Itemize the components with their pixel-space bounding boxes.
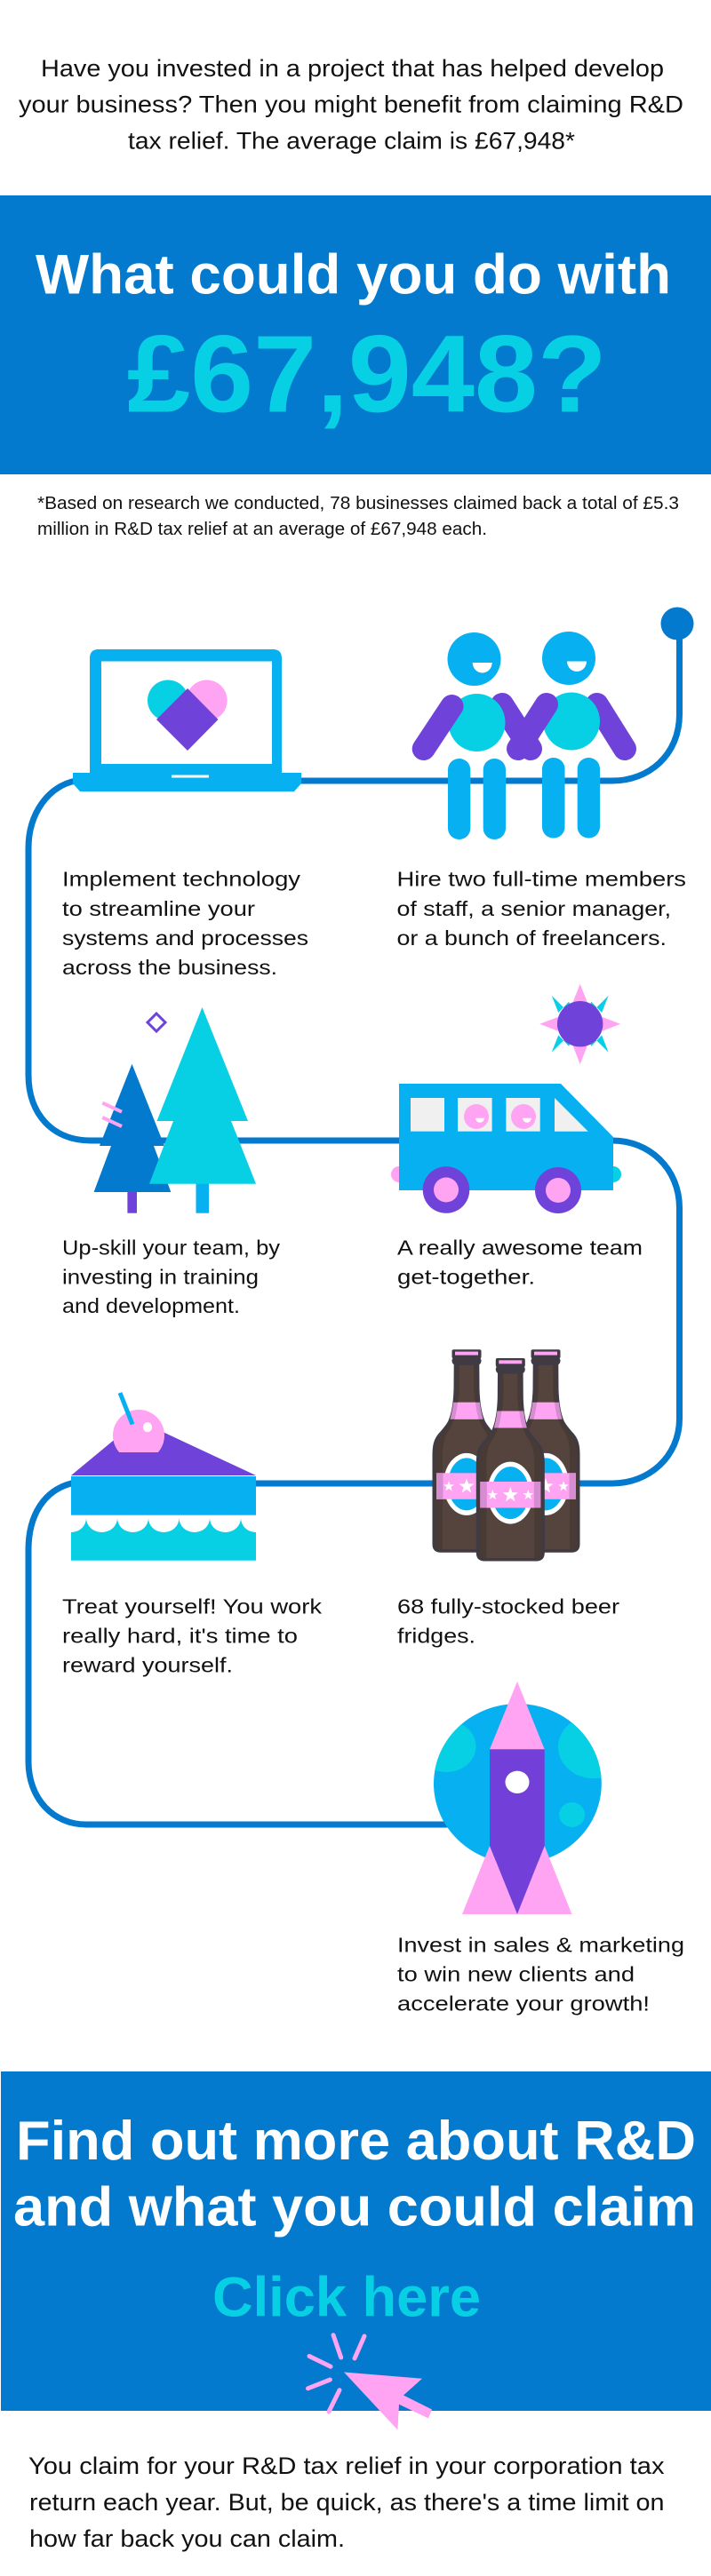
icon: trees [94, 1007, 256, 1213]
person two [518, 632, 625, 839]
closing text: return each year. But, be quick, as there's a time limit on [29, 2489, 664, 2516]
text: team get-together: A really awesome team [397, 1236, 643, 1260]
footnote [37, 494, 679, 539]
headline figure: £67,948? [127, 314, 607, 435]
text: implement technology: across the business. [62, 956, 277, 979]
text: up-skill: Up-skill your team, by [62, 1236, 281, 1260]
text: team get-together: get-together. [397, 1266, 535, 1289]
intro text: your business? Then you might benefit from claiming R&D [19, 91, 683, 117]
text: sales and marketing: to win new clients and [397, 1963, 635, 1986]
text: beer fridges: fridges. [397, 1624, 475, 1647]
call to action heading: Find out more about R&D [16, 2111, 696, 2172]
icon: two team members [424, 632, 625, 839]
call to action heading: and what you could claim [13, 2176, 696, 2238]
text: up-skill [62, 1236, 281, 1317]
text: sales and marketing: Invest in sales & marketing [397, 1933, 684, 1956]
text: implement technology [62, 867, 308, 979]
text: sales and marketing [397, 1933, 684, 2015]
icon: cake slice [71, 1393, 256, 1561]
click here link: Click here [212, 2266, 481, 2328]
footnote: million in R&D tax relief at an average of £67,948 each. [37, 520, 487, 539]
icon: sun [539, 984, 620, 1064]
text: team get-together [397, 1236, 643, 1289]
icon: cursor [308, 2335, 432, 2430]
text: implement technology: to streamline your [62, 897, 255, 920]
icon: van [391, 1084, 621, 1213]
text: sales and marketing: accelerate your growth! [397, 1992, 650, 2015]
text: hire staff [396, 867, 686, 950]
text: implement technology: systems and processes [62, 926, 308, 950]
heading: What could you do with [36, 243, 671, 306]
text: treat yourself: Treat yourself! You work [62, 1595, 323, 1618]
text: beer fridges: 68 fully-stocked beer [397, 1595, 619, 1618]
closing text: how far back you can claim. [29, 2525, 345, 2552]
text: hire staff: Hire two full-time members [396, 867, 686, 890]
panel: headline banner [0, 195, 711, 474]
closing text: You claim for your R&D tax relief in your corporation tax [28, 2453, 665, 2479]
intro text [19, 55, 683, 155]
icon: rocket and globe [434, 1682, 602, 1914]
text: up-skill: and development. [62, 1294, 240, 1317]
text: treat yourself [62, 1595, 323, 1676]
panel: call to action banner [1, 2071, 711, 2411]
text: hire staff: or a bunch of freelancers. [396, 926, 667, 950]
text: treat yourself: reward yourself. [62, 1653, 233, 1676]
icon: beer bottles [434, 1349, 579, 1560]
text: treat yourself: really hard, it's time to [62, 1624, 298, 1647]
connector path [28, 608, 693, 1825]
footnote: *Based on research we conducted, 78 businesses claimed back a total of £5.3 [37, 494, 679, 513]
text: beer fridges [397, 1595, 619, 1647]
intro text: tax relief. The average claim is £67,948* [128, 128, 576, 155]
person one [424, 632, 531, 839]
closing text [28, 2453, 665, 2552]
call to action heading [13, 2111, 696, 2238]
text: implement technology: Implement technology [62, 867, 301, 890]
text: up-skill: investing in training [62, 1266, 259, 1289]
text: hire staff: of staff, a senior manager, [396, 897, 671, 920]
icon: laptop with heart [73, 649, 301, 791]
intro text: Have you invested in a project that has helped develop [41, 55, 664, 82]
